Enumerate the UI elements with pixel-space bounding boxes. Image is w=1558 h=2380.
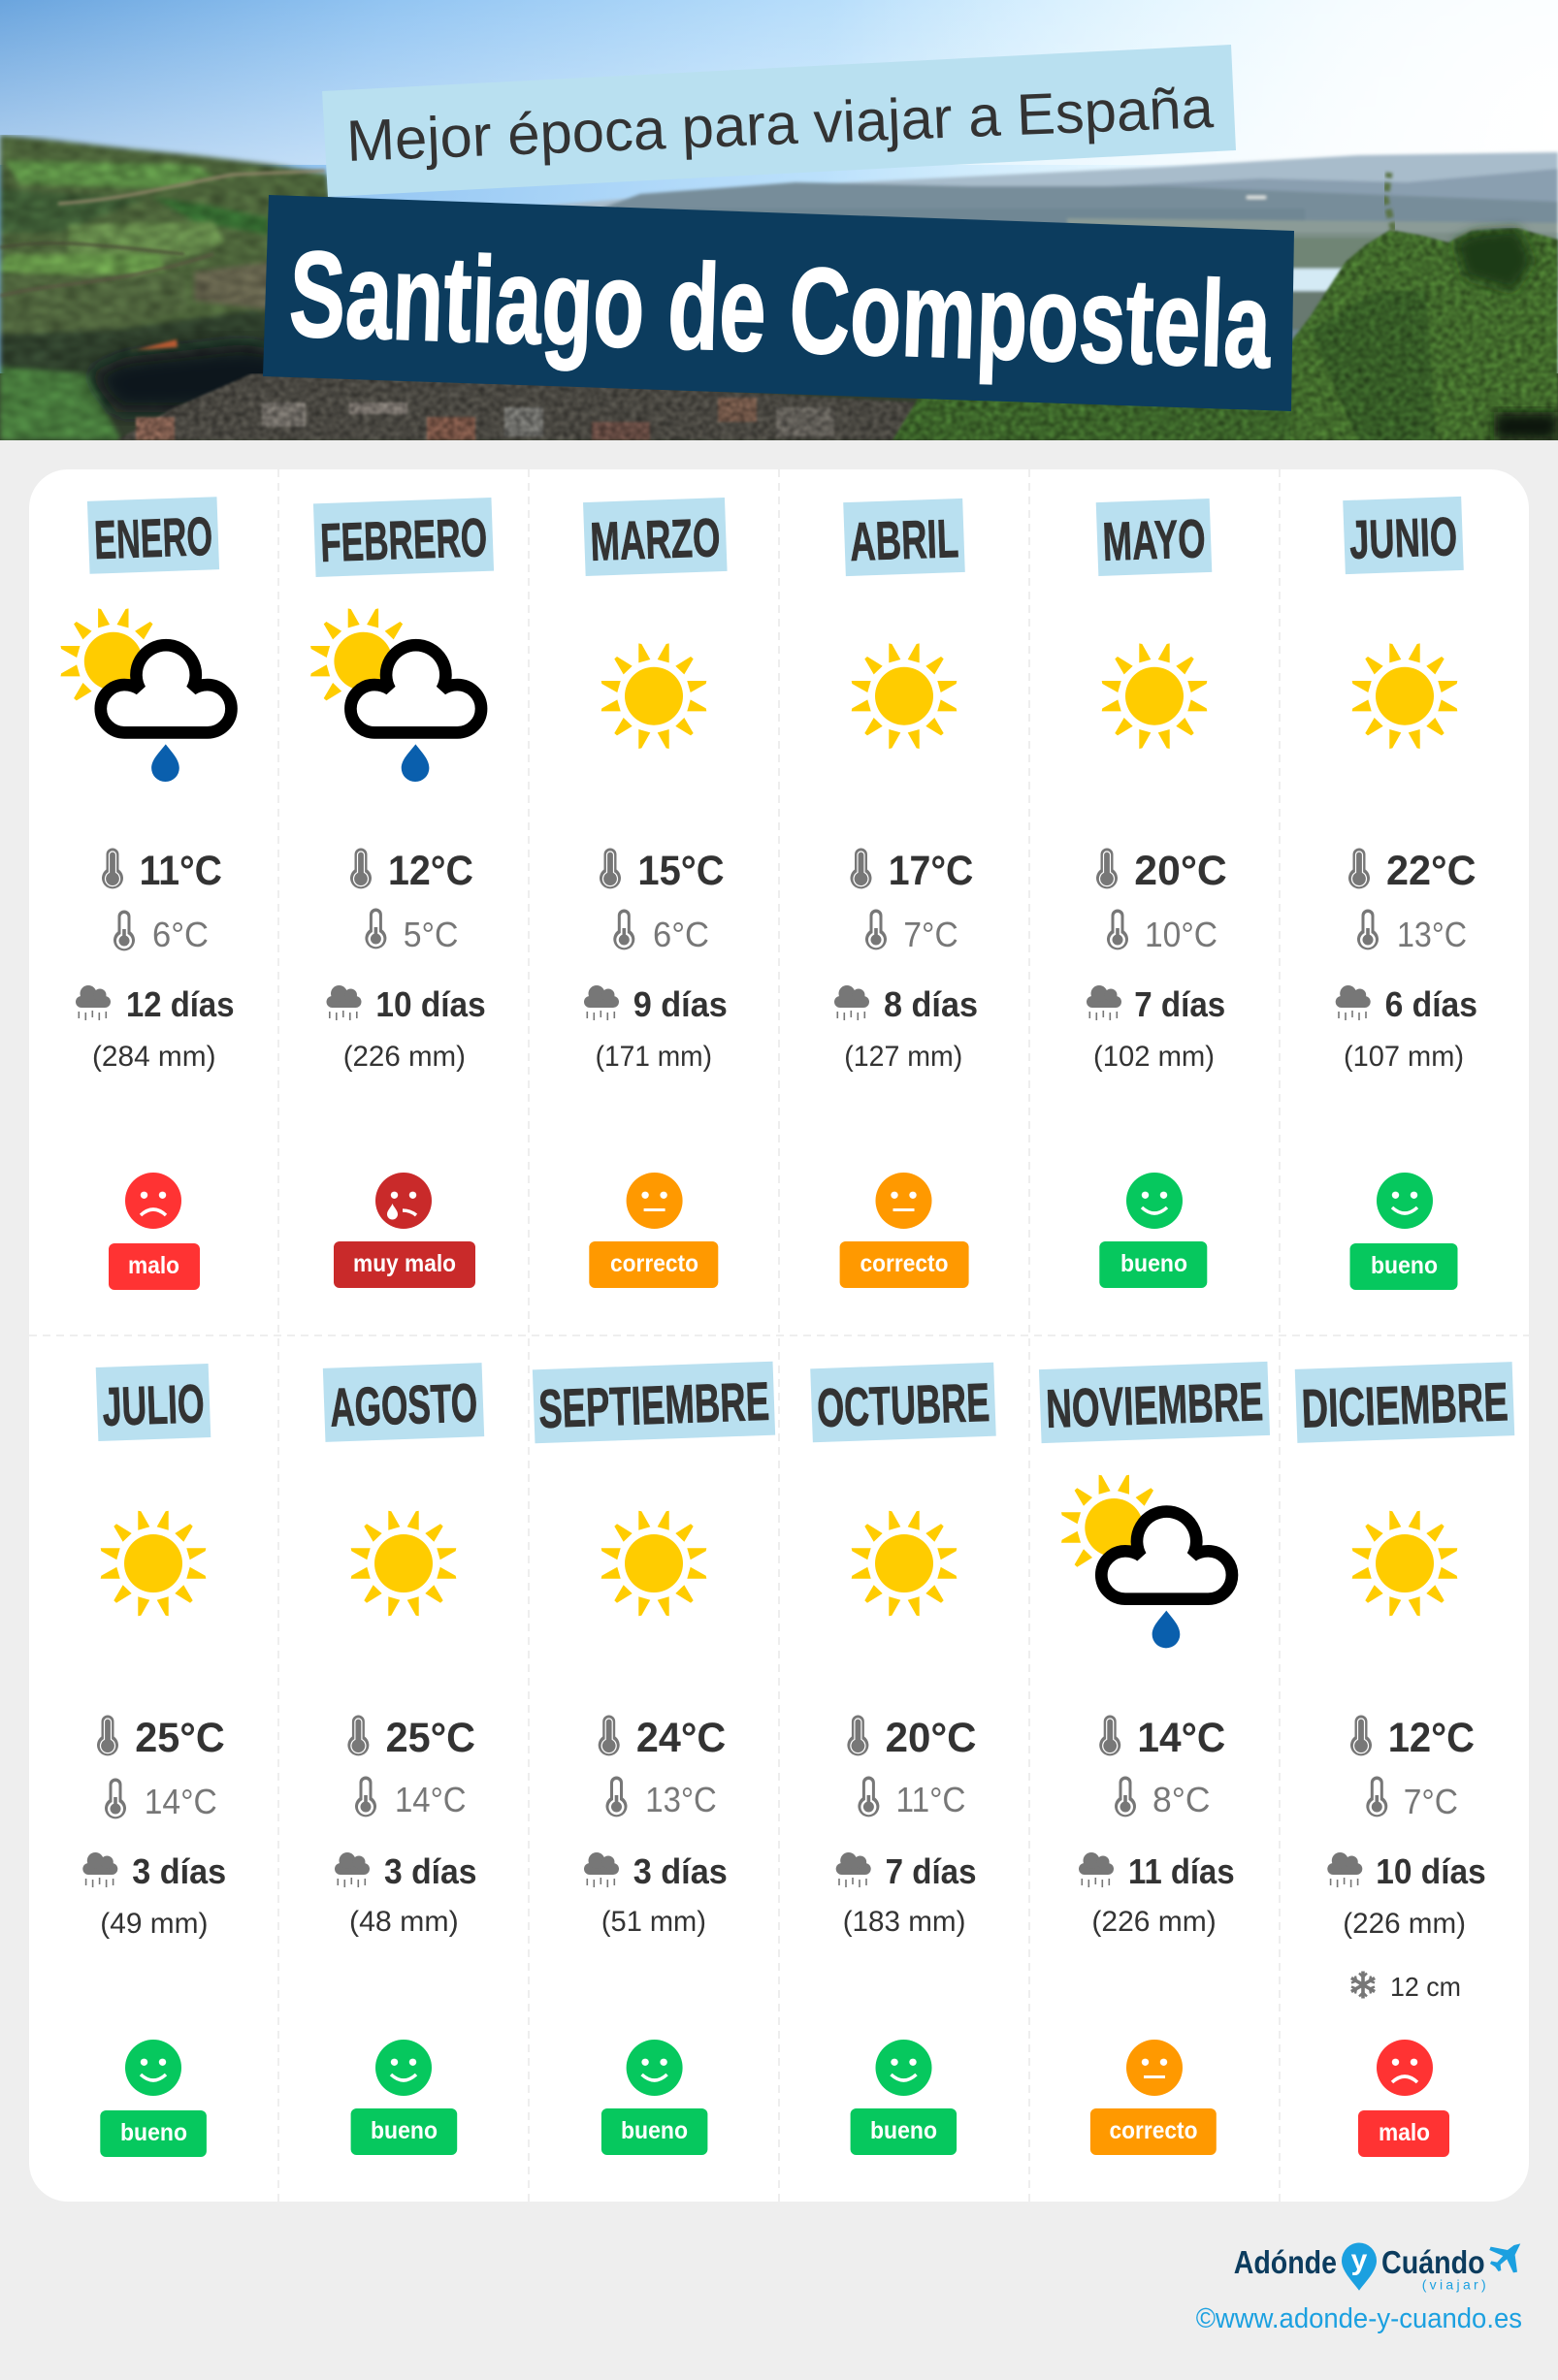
icon: sun [852, 1511, 957, 1616]
rainfall: (226 mm) [1091, 1906, 1217, 1938]
rating: bueno: bueno [621, 2117, 688, 2144]
min temperature: 14°C [145, 1782, 217, 1821]
rating: bueno [1099, 1173, 1207, 1288]
panel: octubre [810, 1363, 996, 2155]
min temperature [1366, 1777, 1458, 1821]
rating: correcto: correcto [610, 1250, 698, 1277]
icon: sun [351, 1511, 456, 1616]
month heading [1343, 497, 1464, 574]
rating: malo: malo [128, 1252, 179, 1279]
panel: enero [61, 497, 235, 1290]
rating: bueno [851, 2040, 957, 2155]
min temperature [1107, 910, 1217, 954]
panel: mayo [1087, 499, 1227, 1288]
rating: malo: malo [1379, 2119, 1430, 2146]
icon: sun [601, 1511, 706, 1616]
panel: agosto [323, 1363, 484, 2155]
panel: abril [834, 499, 978, 1288]
icon: sun [852, 643, 957, 749]
panel: noviembre [1039, 1362, 1270, 2155]
min temperature: 7°C [1404, 1782, 1458, 1821]
month heading [323, 1363, 484, 1442]
title banner [263, 195, 1294, 411]
min temperature: 10°C [1145, 915, 1217, 954]
min temperature [858, 1777, 966, 1819]
month heading: MAYO [1102, 507, 1207, 572]
min temperature [865, 910, 958, 954]
rainy days: 12 días [126, 984, 235, 1024]
icon: sun and cloud with rain [61, 608, 231, 782]
max temperature [1348, 848, 1477, 894]
max temperature: 20°C [886, 1715, 976, 1761]
icon: sun and cloud with rain [310, 608, 481, 782]
right trees [1290, 228, 1558, 440]
min temperature [365, 908, 458, 954]
max temperature: 20°C [1134, 848, 1227, 894]
rainy days: 7 días [886, 1851, 976, 1891]
snowfall: 12 cm [1390, 1972, 1461, 2002]
rating: malo [109, 1173, 200, 1290]
icon: map pin: y [1351, 2244, 1368, 2276]
rainy days [834, 984, 978, 1024]
icon: sun [1352, 1511, 1457, 1616]
header photo: vineyard valley landscape [0, 0, 1558, 440]
panel: febrero [310, 498, 494, 1288]
rainy days: 7 días [1134, 984, 1225, 1024]
rating: muy malo [334, 1173, 475, 1288]
rating: bueno [351, 2040, 457, 2155]
rainy days: 6 días [1385, 984, 1477, 1024]
month heading [583, 498, 728, 576]
max temperature: 24°C [636, 1715, 726, 1761]
month heading [1096, 499, 1212, 576]
max temperature [600, 848, 725, 894]
min temperature [1357, 910, 1467, 954]
rainfall: (49 mm) [100, 1908, 208, 1940]
min temperature [114, 910, 209, 954]
rating: bueno: bueno [1120, 1250, 1187, 1277]
month heading [810, 1363, 996, 1442]
max temperature [350, 848, 473, 894]
month heading [533, 1362, 775, 1443]
rating: correcto [589, 1173, 718, 1288]
rainy days [584, 1851, 728, 1891]
rainy days: 10 días [375, 984, 486, 1024]
max temperature [847, 1715, 976, 1761]
rainfall: (51 mm) [601, 1906, 706, 1938]
month heading: JULIO [102, 1372, 206, 1437]
rating: correcto: correcto [860, 1250, 949, 1277]
icon: sun and cloud with rain [1061, 1475, 1232, 1648]
rainy days [335, 1851, 477, 1891]
rainy days [836, 1851, 976, 1891]
month heading [1039, 1362, 1270, 1443]
rating: bueno: bueno [870, 2117, 937, 2144]
month heading [843, 499, 965, 576]
min temperature [105, 1779, 217, 1821]
max temperature: 11°C [140, 848, 222, 894]
subtitle banner: Mejor época para viajar a España [345, 75, 1215, 174]
panel: marzo [583, 498, 728, 1288]
rating: correcto [840, 1173, 969, 1288]
panel: monthly calendar card [29, 469, 1529, 2202]
month heading [96, 1364, 211, 1441]
rating: bueno [100, 2040, 207, 2157]
rainy days: 10 días [1376, 1851, 1486, 1891]
rating: bueno: bueno [120, 2119, 187, 2146]
month heading: NOVIEMBRE [1045, 1370, 1264, 1439]
max temperature [850, 848, 973, 894]
min temperature [605, 1777, 717, 1819]
rainy days [584, 984, 728, 1024]
icon: sun [601, 643, 706, 749]
town [116, 373, 1305, 440]
rainy days: 3 días [633, 1851, 728, 1891]
min temperature: 13°C [645, 1780, 717, 1819]
rainfall: (183 mm) [843, 1906, 966, 1938]
rainy days: 9 días [633, 984, 728, 1024]
month heading: ABRIL [849, 507, 959, 572]
min temperature: 13°C [1397, 915, 1467, 954]
rainy days [82, 1851, 226, 1891]
min temperature [355, 1777, 466, 1819]
rainy days: 11 días [1128, 1851, 1235, 1891]
subtitle banner [322, 45, 1236, 197]
panel: julio [82, 1364, 226, 2157]
rainy days: 3 días [132, 1851, 226, 1891]
month heading: OCTUBRE [816, 1371, 990, 1438]
rainfall: (284 mm) [92, 1041, 215, 1073]
rating: bueno [601, 2040, 707, 2155]
rating: correcto [1090, 2040, 1217, 2155]
panel: diciembre [1295, 1362, 1514, 2157]
min temperature [1115, 1777, 1211, 1819]
base ground below banner [0, 373, 1558, 440]
max temperature [97, 1715, 225, 1761]
website url: ©www.adonde-y-cuando.es [1196, 2303, 1522, 2334]
rainy days [326, 984, 486, 1024]
logo: Adónde y Cuándo [1234, 2242, 1520, 2293]
max temperature [1350, 1715, 1475, 1761]
icon: map pin [1342, 2242, 1377, 2291]
rainy days [1336, 984, 1477, 1024]
month heading [313, 498, 494, 577]
icon: sun [1352, 643, 1457, 749]
rainy days: 8 días [884, 984, 978, 1024]
month heading: JUNIO [1348, 505, 1458, 570]
min temperature [613, 910, 709, 954]
logo: Adónde y Cuándo: (viajar) [1422, 2277, 1486, 2293]
logo: Adónde y Cuándo: Cuándo [1381, 2244, 1485, 2280]
max temperature [102, 848, 222, 894]
panel: septiembre [533, 1362, 775, 2155]
rainy days [76, 984, 235, 1024]
max temperature [347, 1715, 475, 1761]
rainfall: (171 mm) [596, 1041, 712, 1073]
rainfall: (226 mm) [1343, 1908, 1466, 1940]
icon: sun [1102, 643, 1207, 749]
icon: airplane [1489, 2243, 1520, 2272]
max temperature: 12°C [388, 848, 473, 894]
min temperature: 6°C [653, 915, 709, 954]
rainfall: (107 mm) [1344, 1041, 1464, 1073]
month heading [87, 497, 219, 574]
panel: junio [1336, 497, 1477, 1290]
month heading: AGOSTO [329, 1371, 478, 1438]
rating: bueno: bueno [371, 2117, 438, 2144]
min temperature: 6°C [152, 915, 209, 954]
rainy days [1079, 1851, 1235, 1891]
max temperature: 25°C [386, 1715, 475, 1761]
rainfall: (226 mm) [343, 1041, 466, 1073]
max temperature [599, 1715, 726, 1761]
rainy days: 3 días [384, 1851, 477, 1891]
snowfall [1351, 1971, 1461, 2002]
left hillside [0, 135, 335, 440]
max temperature: 22°C [1386, 848, 1477, 894]
max temperature: 14°C [1137, 1715, 1225, 1761]
rainfall: (48 mm) [349, 1906, 459, 1938]
max temperature: 17°C [889, 848, 973, 894]
max temperature [1099, 1715, 1225, 1761]
rating: bueno [1350, 1173, 1457, 1290]
min temperature: 7°C [903, 915, 958, 954]
max temperature: 15°C [637, 848, 725, 894]
rainfall: (127 mm) [844, 1041, 962, 1073]
min temperature: 5°C [404, 915, 458, 954]
min temperature: 11°C [896, 1780, 966, 1819]
rating: bueno: bueno [1371, 1252, 1438, 1279]
min temperature: 14°C [395, 1780, 466, 1819]
rainy days [1327, 1851, 1486, 1891]
month heading: SEPTIEMBRE [537, 1370, 770, 1439]
rainfall: (102 mm) [1093, 1041, 1215, 1073]
max temperature: 12°C [1388, 1715, 1475, 1761]
logo: Adónde y Cuándo: Adónde [1234, 2244, 1337, 2280]
rating: muy malo: muy malo [353, 1250, 456, 1277]
rating: correcto: correcto [1110, 2117, 1197, 2144]
month heading: ENERO [93, 505, 213, 570]
max temperature: 25°C [135, 1715, 225, 1761]
month heading: MARZO [589, 506, 721, 572]
month heading: FEBRERO [319, 506, 488, 573]
min temperature: 8°C [1152, 1780, 1211, 1819]
icon: sun [101, 1511, 206, 1616]
rating: malo [1358, 2040, 1449, 2157]
rainy days [1087, 984, 1225, 1024]
